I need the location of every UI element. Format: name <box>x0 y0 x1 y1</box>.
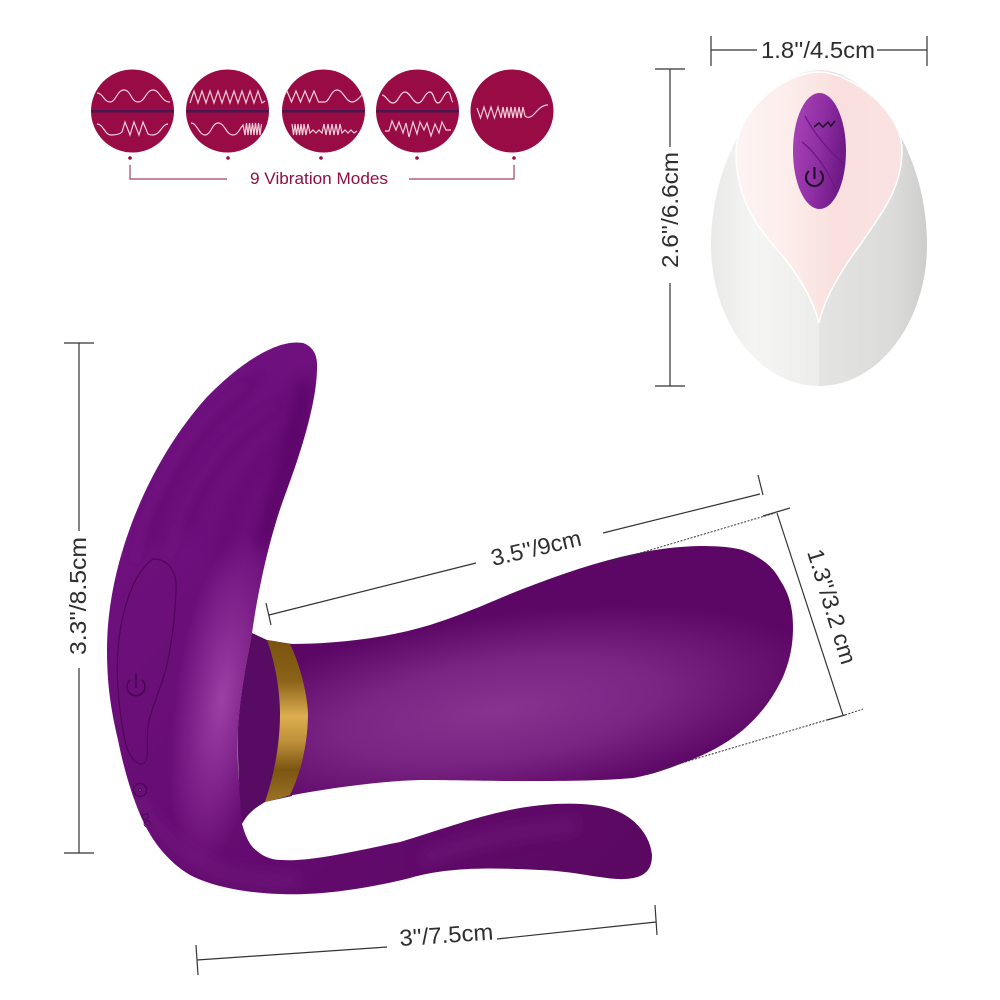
dimension: shaft length: 3.5''/9cm <box>488 525 584 571</box>
dimension: shaft diameter <box>610 508 863 773</box>
DC port label: DC <box>138 812 152 829</box>
device body <box>90 330 793 910</box>
dimension: overall height: 3.3''/8.5cm <box>65 537 91 655</box>
dimension: shaft diameter: 1.3''/3.2 cm <box>802 546 862 667</box>
icon: mode 4 <box>376 70 459 152</box>
icon: connector dots and bracket <box>128 156 516 179</box>
remote shell right half <box>819 70 927 386</box>
remote button <box>793 93 846 209</box>
gold ring <box>265 640 308 802</box>
icon: mode 2 <box>186 70 269 152</box>
base behind ring <box>238 633 292 824</box>
icon: mode 5 <box>470 70 554 152</box>
panel: vibration modes <box>91 70 554 188</box>
icon: power symbol <box>127 673 145 696</box>
icon: mode 1 <box>91 70 174 152</box>
dimension: base length: 3''/7.5cm <box>399 918 494 951</box>
icon: remote control <box>711 70 927 386</box>
remote pink face <box>736 72 902 323</box>
remote shell left half <box>711 70 819 386</box>
icon: mode 3 <box>282 70 365 152</box>
dimension: remote height: 2.6''/6.6cm <box>657 152 683 268</box>
heading: 9 vibration modes: 9 Vibration Modes <box>250 169 388 188</box>
icon: small indicator <box>134 784 146 796</box>
dimension: remote width <box>711 36 927 66</box>
dimension: shaft length <box>266 475 763 625</box>
dimension: overall height <box>64 343 94 853</box>
icon: power glyph <box>806 167 823 186</box>
button outline <box>117 559 176 764</box>
inner shaft <box>288 546 793 796</box>
dimension: remote height <box>655 69 685 386</box>
dimension: remote width: 1.8''/4.5cm <box>761 37 875 63</box>
outer arm <box>107 342 652 894</box>
icon: vibration glyph <box>814 121 835 127</box>
dimension: base length <box>196 905 657 975</box>
